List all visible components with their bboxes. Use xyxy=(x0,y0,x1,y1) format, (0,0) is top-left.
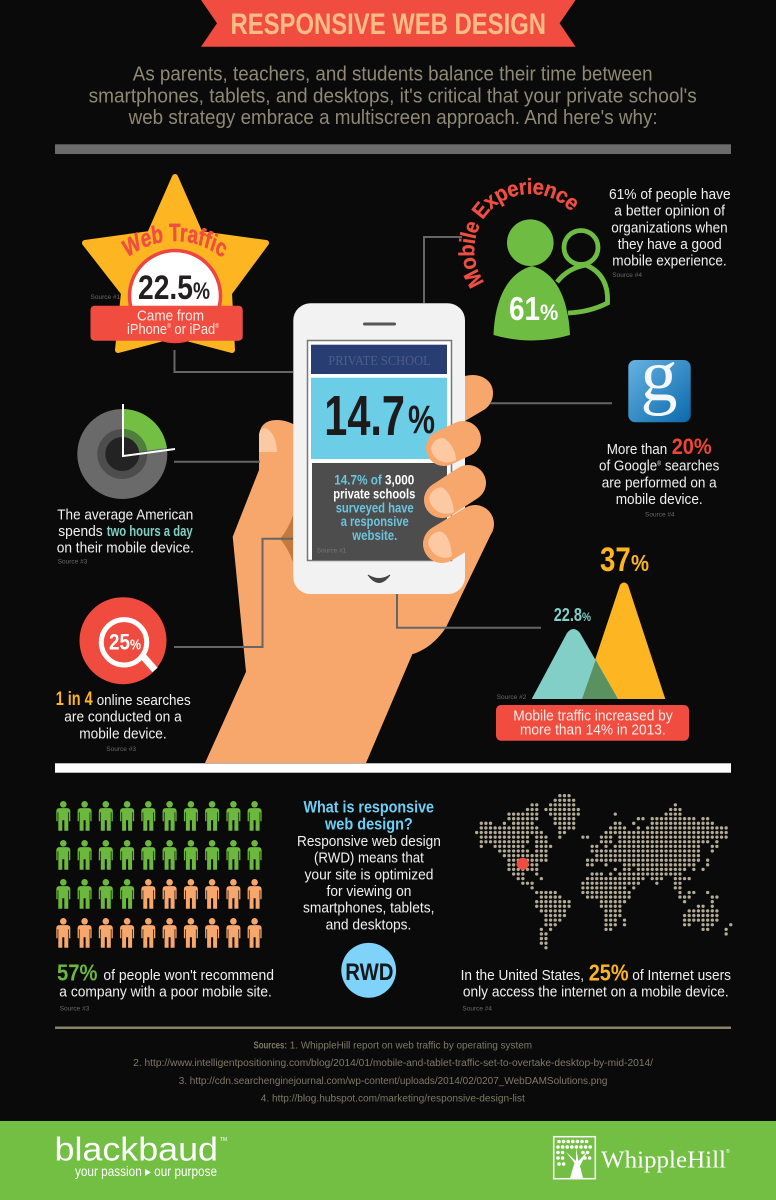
blackbaud logo: TM xyxy=(220,1137,227,1143)
57% caption: of people won't recommend xyxy=(103,967,274,984)
mobile traffic chart xyxy=(496,541,689,741)
icon: google g: g xyxy=(640,335,678,417)
source: Source #2 xyxy=(497,694,527,701)
caption: searches xyxy=(661,458,719,475)
tree box xyxy=(554,1137,595,1179)
title banner xyxy=(201,0,576,47)
definition: smartphones, tablets, xyxy=(303,900,434,917)
phone body xyxy=(293,303,465,594)
caption: on their mobile device. xyxy=(57,540,194,557)
whipplehill logo: ® xyxy=(726,1148,730,1155)
mobile experience xyxy=(458,178,731,340)
US 25% caption: In the United States, xyxy=(461,967,584,984)
57% caption xyxy=(57,960,274,1013)
source: Source #1 xyxy=(90,294,121,301)
clock: two hours xyxy=(57,404,194,565)
caption xyxy=(57,506,194,565)
RWD badge xyxy=(341,943,396,998)
description: mobile experience. xyxy=(612,253,727,270)
caption: online searches xyxy=(97,692,191,709)
description panel: surveyed have xyxy=(336,499,414,515)
top finger xyxy=(460,375,493,421)
description: a better opinion of xyxy=(614,203,726,220)
caption: 20% xyxy=(672,434,712,459)
sources: 4. http://blog.hubspot.com/marketing/responsive-design-list xyxy=(261,1094,525,1105)
red label: ® xyxy=(215,323,219,330)
61%: % xyxy=(540,300,558,325)
teal peak xyxy=(532,629,618,699)
thumb nail xyxy=(259,428,277,452)
nail 2 xyxy=(429,488,454,514)
what is responsive web design xyxy=(297,798,441,998)
caption xyxy=(599,434,719,518)
red caption: Mobile traffic increased by xyxy=(513,708,673,725)
star shape xyxy=(85,177,266,350)
finger 1 xyxy=(444,439,463,448)
nail 1 xyxy=(431,438,456,462)
red label: ® xyxy=(167,323,171,330)
icon: google g xyxy=(628,335,691,422)
circle xyxy=(130,250,220,342)
caption: 1 in 4 xyxy=(56,689,93,710)
stat panel: 14.7%: 14.7 xyxy=(324,384,405,448)
intro text xyxy=(89,63,697,129)
definition: Responsive web design xyxy=(297,833,441,850)
caption: Source #3 xyxy=(58,558,88,565)
caption: More than xyxy=(607,441,667,458)
caption: The average American xyxy=(57,506,193,523)
22.5%: 22.5 xyxy=(138,269,193,307)
speaker xyxy=(363,322,396,326)
heading: What is responsive xyxy=(304,798,434,817)
palm shadow xyxy=(280,515,293,562)
sources: 1. WhippleHill report on web traffic by operating system xyxy=(290,1041,532,1052)
fingers over phone xyxy=(428,438,475,558)
caption: mobile device. xyxy=(79,725,167,742)
caption: of Google xyxy=(599,458,664,475)
stat panel: 14.7%: % xyxy=(408,398,435,442)
title: RESPONSIVE WEB DESIGN xyxy=(230,8,546,41)
green people xyxy=(56,801,262,909)
22.8%: % xyxy=(582,610,591,624)
blackbaud logo: your passion ▸ our purpose xyxy=(75,1163,217,1179)
US marker xyxy=(517,858,529,870)
61%: 61 xyxy=(509,290,540,327)
yellow peak xyxy=(582,582,665,699)
outline person xyxy=(557,230,608,313)
phone xyxy=(293,303,465,594)
star: web traffic xyxy=(82,174,269,353)
definition: your site is optimized xyxy=(304,866,434,883)
curved heading: Web Traffic xyxy=(120,224,226,256)
footer xyxy=(0,1121,776,1200)
sources xyxy=(133,1041,653,1105)
heading xyxy=(304,798,434,833)
definition: for viewing on xyxy=(326,883,411,900)
US 25% caption: of Internet users xyxy=(632,967,731,984)
home button xyxy=(368,575,390,582)
red label: iPhone xyxy=(127,321,174,338)
connector lines xyxy=(174,237,612,647)
search: 25% xyxy=(56,597,191,753)
google xyxy=(599,335,719,518)
finger 2 xyxy=(442,483,468,500)
map dots xyxy=(477,796,731,948)
hand holding phone xyxy=(205,375,493,763)
hand xyxy=(205,420,493,763)
description xyxy=(609,186,731,279)
header bar: private school: PRIVATE SCHOOL xyxy=(328,353,431,368)
22.8%: 22.8 xyxy=(554,605,582,625)
25% label: % xyxy=(130,636,141,653)
description panel xyxy=(312,463,447,560)
US 25% caption: 25% xyxy=(589,960,629,986)
whipplehill logo xyxy=(554,1137,730,1179)
magnifier xyxy=(101,620,155,670)
description panel: Source #1 xyxy=(317,547,347,554)
description: Source #4 xyxy=(612,272,642,279)
red label: Came from xyxy=(137,308,204,325)
red circle xyxy=(80,597,166,684)
red label xyxy=(90,306,243,341)
green sector xyxy=(122,409,167,454)
overlap xyxy=(582,660,618,699)
description panel: 14.7% of 3,000 xyxy=(334,471,414,487)
definition xyxy=(297,833,441,933)
wordmark: WhippleHill xyxy=(601,1147,726,1173)
world map xyxy=(477,796,731,948)
57% caption: Source #3 xyxy=(60,1006,90,1013)
RWD badge: RWD xyxy=(345,959,394,986)
blackbaud logo: blackbaud xyxy=(54,1131,218,1168)
heading: web design? xyxy=(324,814,413,833)
caption: are conducted on a xyxy=(64,709,182,726)
caption: ® xyxy=(657,461,662,468)
screen xyxy=(308,340,452,560)
sources: Sources: xyxy=(254,1041,287,1052)
definition: (RWD) means that xyxy=(314,850,425,867)
finger 3 xyxy=(442,524,475,544)
intro text: web strategy embrace a multiscreen approach. And here's why: xyxy=(128,106,658,129)
intro text: As parents, teachers, and students balance their time between xyxy=(133,63,653,86)
37%: % xyxy=(631,550,649,576)
sources: 2. http://www.intelligentpositioning.com/blog/2014/01/mobile-and-tablet-traffic-set-to-overtake-desktop-by-mid-2014/ xyxy=(133,1058,653,1069)
US 25% caption: Source #4 xyxy=(462,1006,492,1013)
description panel: a responsive xyxy=(341,513,409,529)
header bar: private school xyxy=(311,345,447,374)
people pictogram xyxy=(56,801,262,948)
sources: 3. http://cdn.searchenginejournal.com/wp-content/uploads/2014/02/0207_WebDAMSolutions.png xyxy=(179,1076,607,1087)
clock rings xyxy=(77,409,167,499)
caption: Source #3 xyxy=(106,746,136,753)
clock hands xyxy=(123,404,175,456)
description: they have a good xyxy=(618,236,722,253)
solid person xyxy=(494,219,570,340)
US 25% caption xyxy=(461,960,731,1013)
22.5%: % xyxy=(193,278,210,305)
37%: 37 xyxy=(600,541,631,579)
description panel: website. xyxy=(351,527,397,543)
caption xyxy=(56,689,191,753)
US 25% caption: only access the internet on a mobile device. xyxy=(463,984,729,1001)
57% caption: a company with a poor mobile site. xyxy=(59,984,272,1001)
description panel: private schools xyxy=(333,485,415,501)
caption: two hours a day xyxy=(107,524,193,540)
red caption: more than 14% in 2013. xyxy=(520,721,666,738)
blackbaud logo xyxy=(54,1131,227,1179)
57% caption: 57% xyxy=(57,960,97,986)
caption: spends xyxy=(58,523,103,540)
caption: Source #4 xyxy=(645,511,675,518)
intro text: smartphones, tablets, and desktops, it's critical that your private school's xyxy=(89,84,697,108)
description: organizations when xyxy=(611,219,728,236)
curved heading: Mobile Experience xyxy=(458,178,577,289)
orange people xyxy=(56,879,262,948)
caption: mobile device. xyxy=(616,491,703,508)
definition: and desktops. xyxy=(326,916,411,933)
description: 61% of people have xyxy=(609,186,731,203)
stat panel: 14.7% xyxy=(311,378,447,459)
red caption xyxy=(496,705,689,741)
25% label: 25 xyxy=(109,629,130,654)
caption: are performed on a xyxy=(602,474,717,491)
red label: or iPad xyxy=(171,321,215,338)
nail 3 xyxy=(428,532,452,558)
